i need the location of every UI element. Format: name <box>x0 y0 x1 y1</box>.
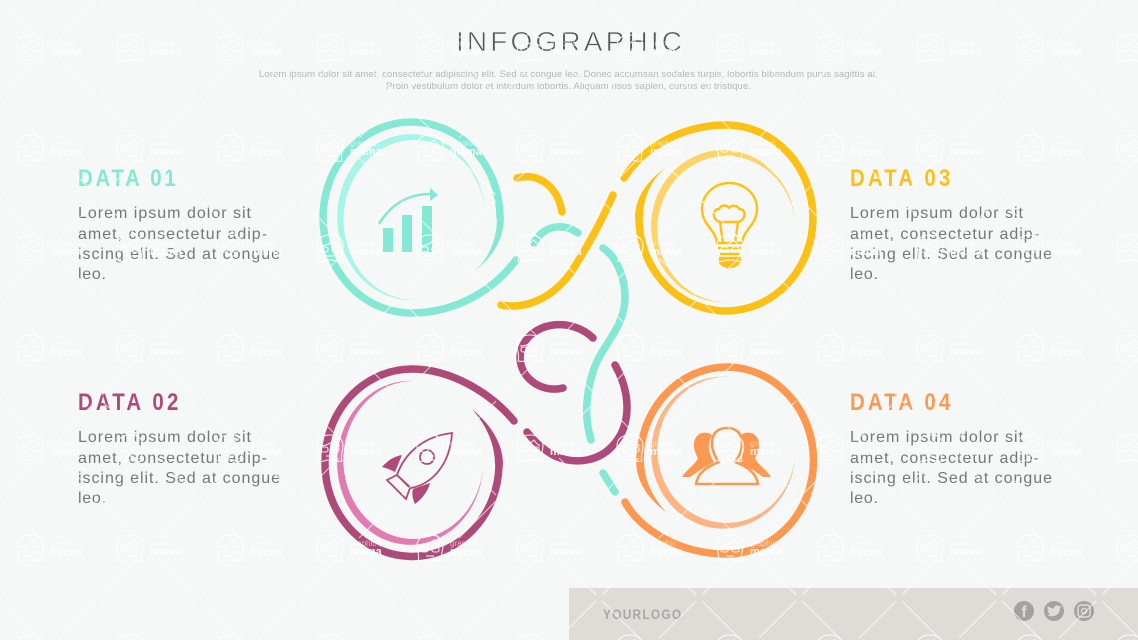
panel: data 03 text: Lorem ipsum dolor sit <box>850 205 1024 222</box>
icon: rocket <box>382 433 452 504</box>
icon: bar chart with arrow <box>379 188 438 252</box>
icon: instagram <box>1074 601 1094 621</box>
panel: data 04 text: iscing elit. Sed at congue <box>850 470 1052 487</box>
footer bar <box>569 588 1138 640</box>
icon: facebook <box>1014 601 1034 621</box>
panel: data 03 text: iscing elit. Sed at congue <box>850 246 1052 263</box>
icon: twitter <box>1044 601 1064 621</box>
panel: data 02 text: leo. <box>78 490 106 507</box>
yellow spiral ring <box>624 125 813 311</box>
panel: data 03 text: leo. <box>850 266 878 283</box>
footer logo text: YOURLOGO <box>603 606 681 622</box>
panel: data 04 text: Lorem ipsum dolor sit <box>850 429 1024 446</box>
orange spiral ring <box>625 367 814 554</box>
icon: people group <box>682 428 771 484</box>
subtitle text <box>259 69 878 92</box>
panel: data 01 text <box>78 164 280 283</box>
panel: data 04 text: leo. <box>850 490 878 507</box>
panel: data 01 text: Lorem ipsum dolor sit <box>78 205 252 222</box>
panel: data 01 text: amet, consectetur adip- <box>78 226 267 243</box>
panel: data 02 text <box>78 388 280 507</box>
panel: data 04 text: amet, consectetur adip- <box>850 450 1039 467</box>
title: INFOGRAPHIC <box>456 26 682 57</box>
teal spiral ring <box>323 122 516 313</box>
connector curves <box>501 177 627 492</box>
panel: data 03 text <box>850 164 1052 283</box>
panel: data 03 text: amet, consectetur adip- <box>850 226 1039 243</box>
panel: data 01 text: DATA 01 <box>78 164 176 191</box>
panel: data 03 text: DATA 03 <box>850 164 950 191</box>
subtitle text: Proin vestibulum dolor et interdum lobortis. Aliquam risus sapien, cursus eu tristique. <box>386 81 751 92</box>
icon: facebook: f <box>1021 604 1027 621</box>
icon: light bulb <box>702 183 757 267</box>
magenta spiral ring <box>325 369 514 556</box>
panel: data 02 text: iscing elit. Sed at congue <box>78 470 280 487</box>
panel: data 02 text: amet, consectetur adip- <box>78 450 267 467</box>
panel: data 02 text: DATA 02 <box>78 388 178 415</box>
panel: data 04 text <box>850 388 1052 507</box>
panel: data 02 text: Lorem ipsum dolor sit <box>78 429 252 446</box>
panel: data 01 text: iscing elit. Sed at congue <box>78 246 280 263</box>
subtitle text: Lorem ipsum dolor sit amet, consectetur adipiscing elit. Sed at congue leo. Donec accumsan sodales turpis, lobortis bibendum purus sagittis at. <box>259 69 878 80</box>
panel: data 01 text: leo. <box>78 266 106 283</box>
panel: data 04 text: DATA 04 <box>850 388 951 415</box>
